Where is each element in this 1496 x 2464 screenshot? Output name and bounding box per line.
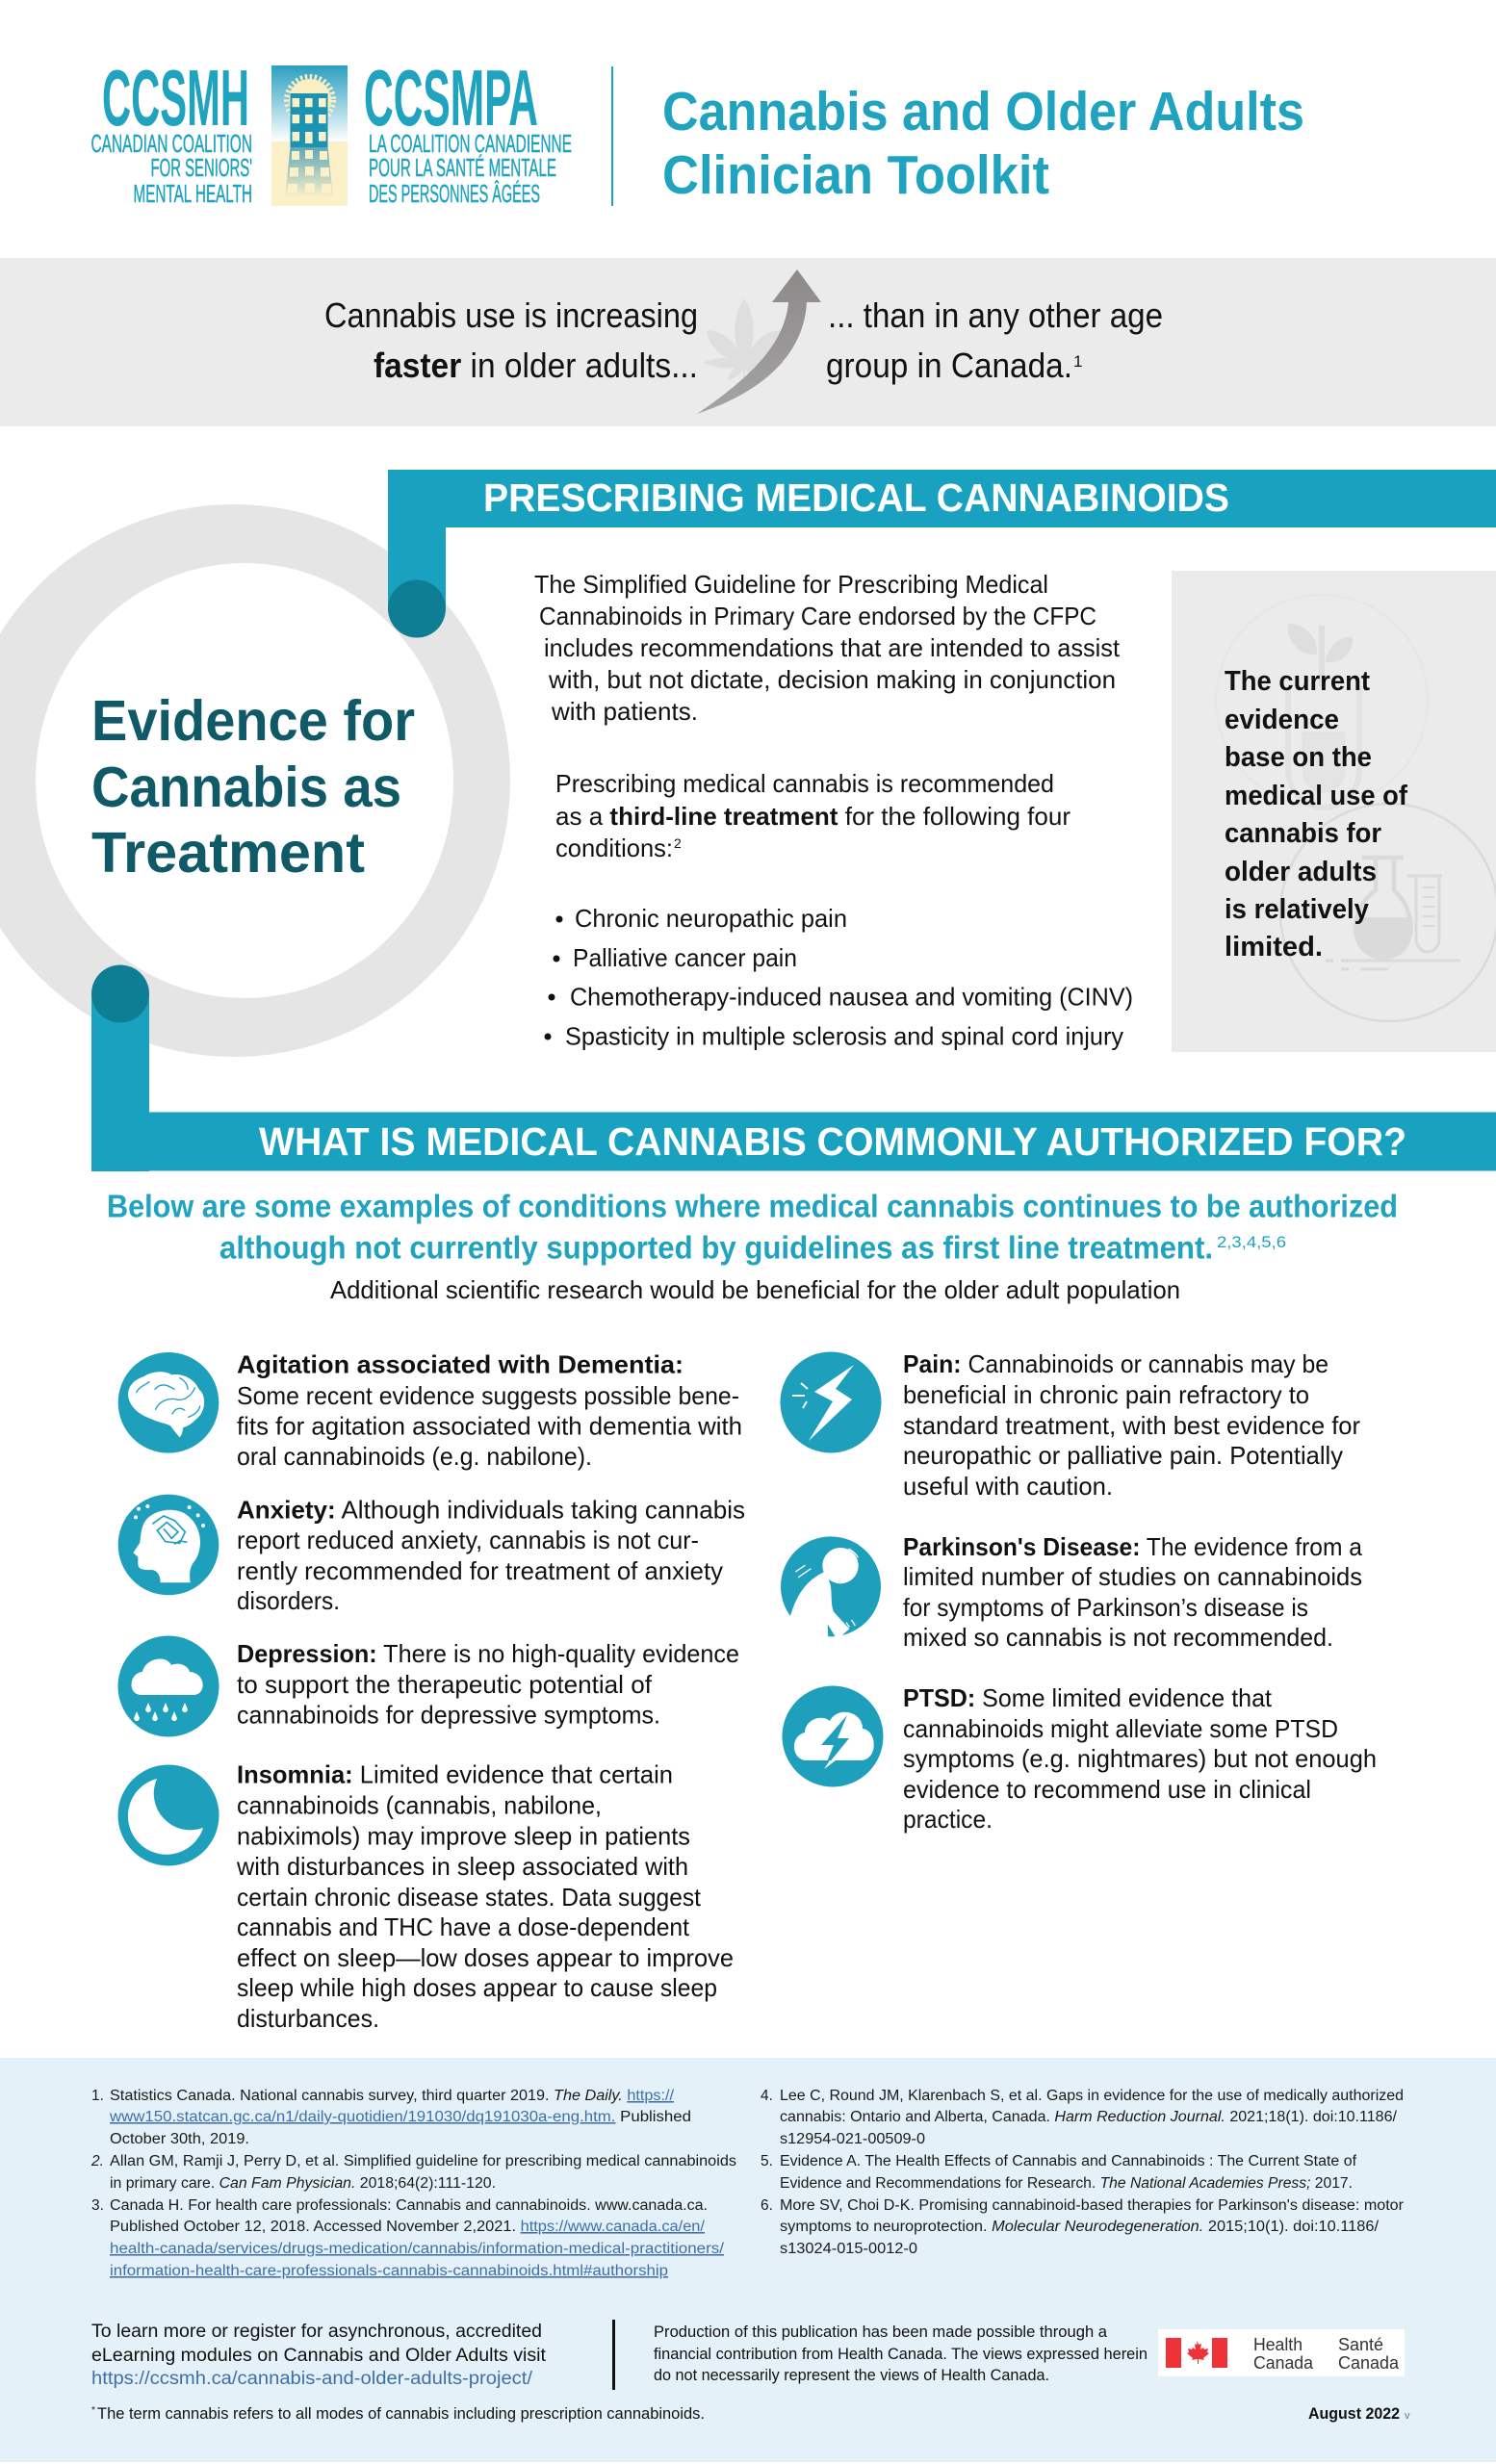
text: evidence statement: older adults	[1225, 857, 1377, 887]
text: pain	[903, 1349, 1360, 1501]
references: left column: Allan GM, Ramji J, Perry D, et al. Simplified guideline for prescribing medical cannabinoids	[110, 2153, 736, 2169]
text: evidence statement	[1225, 666, 1407, 962]
text: evidence statement: evidence	[1225, 705, 1339, 735]
text: anxiety: report reduced anxiety, cannabis is not cur-	[237, 1526, 699, 1554]
references: right column: 6.	[761, 2197, 773, 2214]
text: dementia: fits for agitation associated with dementia with	[237, 1411, 742, 1440]
references: right column: s12954-021-00509-0	[780, 2131, 925, 2147]
text block: guideline introduction: with patients.	[551, 697, 698, 726]
list: four conditions: Spasticity in multiple sclerosis and spinal cord injury	[565, 1022, 1123, 1051]
list: four conditions: Palliative cancer pain	[573, 943, 797, 972]
references: right column: Lee C, Round JM, Klarenbach S, et al. Gaps in evidence for the use of medically authorized	[780, 2088, 1404, 2104]
heading: evidence for cannabis as treatment: Cannabis as	[91, 756, 401, 819]
icon: rain cloud	[117, 1636, 219, 1736]
text: insomnia: Insomnia: Limited evidence that certain	[237, 1759, 673, 1788]
text: insomnia: effect on sleep—low doses appear to improve	[237, 1943, 734, 1972]
references: right column: Evidence A. The Health Effects of Cannabis and Cannabinoids : The Current State of	[780, 2153, 1357, 2169]
references: right column: 5.	[761, 2153, 773, 2169]
text: insomnia: cannabinoids (cannabis, nabilone,	[237, 1790, 602, 1819]
text: insomnia: sleep while high doses appear to cause sleep	[237, 1973, 717, 2002]
references: left column: October 30th, 2019.	[110, 2131, 249, 2147]
heading: evidence for cannabis as treatment: Evidence for	[91, 689, 415, 753]
text: elearning call to action: https://ccsmh.ca/cannabis-and-older-adults-project/	[91, 2369, 533, 2389]
text: pain: Pain: Cannabinoids or cannabis may be	[903, 1349, 1328, 1378]
references: left column: information-health-care-professionals-cannabis-cannabinoids.html#authorship	[110, 2263, 668, 2279]
text: evidence statement: medical use of	[1225, 781, 1407, 811]
text: anxiety: rently recommended for treatment of anxiety	[237, 1556, 723, 1585]
icon: hunched figure	[781, 1536, 881, 1640]
text: pain: neuropathic or palliative pain. Potentially	[903, 1441, 1343, 1470]
text block: guideline introduction: The Simplified Guideline for Prescribing Medical	[534, 570, 1048, 599]
title: Clinician Toolkit	[662, 144, 1049, 206]
text: evidence statement: limited.	[1225, 932, 1323, 962]
references: right column: Evidence and Recommendations for Research. The National Academies Press; 2017.	[780, 2175, 1353, 2192]
text: dementia: Some recent evidence suggests possible bene-	[237, 1381, 739, 1410]
text: ptsd: evidence to recommend use in clinical	[903, 1775, 1311, 1804]
logo text: English name: CANADIAN COALITION	[90, 129, 252, 158]
text: pain: useful with caution.	[903, 1472, 1113, 1501]
logo: health canada: Canada	[1338, 2353, 1400, 2373]
icon: flask and test tube watermark	[1280, 804, 1496, 1021]
text block: guideline introduction: includes recommendations that are intended to assist	[544, 633, 1121, 662]
text: elearning call to action: To learn more or register for asynchronous, accredited	[91, 2322, 542, 2342]
text: evidence statement: base on the	[1225, 742, 1372, 773]
logo: building with sun	[271, 65, 348, 206]
references: left column: 2.	[90, 2153, 104, 2169]
text: insomnia: certain chronic disease states. Data suggest	[237, 1883, 702, 1912]
item: insomnia	[117, 1759, 734, 2033]
logo text: English name: MENTAL HEALTH	[133, 179, 252, 208]
item: pain	[780, 1349, 1360, 1501]
section bar: what is medical cannabis commonly authorized for: WHAT IS MEDICAL CANNABIS COMMONLY AUTHORIZED FOR?	[259, 1119, 1406, 1164]
item: depression	[117, 1636, 739, 1736]
list: four conditions	[545, 904, 1133, 1051]
text: right statement: 1	[1073, 352, 1082, 371]
text block: guideline introduction	[534, 570, 1121, 726]
icon: brain	[118, 1352, 219, 1453]
text: parkinson's: for symptoms of Parkinson’s disease is	[903, 1593, 1308, 1622]
intro text: examples of authorized conditions: although not currently supported by guidelines as first line treatment.	[219, 1230, 1213, 1265]
references: left column	[90, 2088, 736, 2279]
heading: evidence for cannabis as treatment: Treatment	[91, 821, 365, 885]
references: left column: Canada H. For health care professionals: Cannabis and cannabinoids. www.canada.ca.	[110, 2197, 708, 2214]
date: August 2022	[1308, 2404, 1400, 2423]
footnote: The term cannabis refers to all modes of cannabis including prescription cannabinoids.	[97, 2404, 705, 2423]
text: funding acknowledgement: Production of this publication has been made possible through a	[654, 2323, 1108, 2341]
logo: health canada: Canada	[1253, 2353, 1314, 2373]
logo text: French name: DES PERSONNES ÂGÉES	[369, 179, 540, 208]
text: evidence statement: is relatively	[1225, 894, 1369, 925]
references: left column: Published October 12, 2018. Accessed November 2,2021. https://www.canada.ca/en/	[110, 2219, 706, 2235]
text: elearning call to action: eLearning modules on Cannabis and Older Adults visit	[91, 2346, 547, 2366]
text: ptsd: PTSD: Some limited evidence that	[903, 1683, 1273, 1712]
text: depression	[237, 1639, 739, 1729]
text: ptsd	[903, 1683, 1377, 1834]
references: right column	[761, 2088, 1404, 2257]
intro text: examples of authorized conditions: Below are some examples of conditions where medical cannabis continues to be authorized	[107, 1188, 1398, 1224]
list: four conditions: Chronic neuropathic pain	[575, 904, 847, 933]
text: left statement	[324, 295, 698, 385]
logo text: French name: CCSMPA	[364, 53, 538, 142]
footnote: *	[91, 2405, 95, 2416]
text block: third-line treatment: conditions:	[555, 834, 673, 862]
text: evidence statement: The current	[1225, 666, 1370, 697]
text: anxiety	[237, 1496, 745, 1615]
text block: third-line treatment: 2	[674, 835, 682, 851]
icon: head with scribble	[118, 1495, 219, 1595]
references: left column: 3.	[91, 2197, 104, 2214]
references: right column: symptoms to neuroprotection. Molecular Neurodegeneration. 2015;10(1). doi:10.1186/	[780, 2219, 1380, 2235]
references: right column: More SV, Choi D-K. Promising cannabinoid-based therapies for Parkinson's disease: motor	[780, 2197, 1404, 2214]
text: pain: beneficial in chronic pain refractory to	[903, 1380, 1309, 1409]
intro text: examples of authorized conditions: Additional scientific research would be beneficial for the older adult population	[330, 1275, 1180, 1304]
text: left statement: Cannabis use is increasing	[324, 295, 698, 335]
references: left column: Statistics Canada. National cannabis survey, third quarter 2019. The Daily. https://	[110, 2088, 675, 2104]
references: right column: cannabis: Ontario and Alberta, Canada. Harm Reduction Journal. 2021;18(1). doi:10.1186/	[780, 2109, 1398, 2125]
text: dementia: Agitation associated with Dementia:	[237, 1349, 684, 1378]
references: left column: in primary care. Can Fam Physician. 2018;64(2):111-120.	[110, 2175, 496, 2192]
logo: health canada: Santé	[1338, 2335, 1383, 2354]
references: right column: 4.	[761, 2088, 773, 2104]
text: depression: cannabinoids for depressive symptoms.	[237, 1700, 660, 1729]
title: Cannabis and Older Adults	[662, 81, 1304, 142]
icon: lightning pain	[780, 1351, 882, 1453]
text: ptsd: cannabinoids might alleviate some PTSD	[903, 1714, 1338, 1743]
text: parkinson's: Parkinson's Disease: The evidence from a	[903, 1532, 1363, 1561]
references: left column: health-canada/services/drugs-medication/cannabis/information-medical-practitioners/	[110, 2241, 725, 2257]
text: evidence statement: cannabis for	[1225, 818, 1381, 849]
text: ptsd: symptoms (e.g. nightmares) but not enough	[903, 1744, 1377, 1773]
title	[662, 81, 1304, 206]
icon: storm cloud	[782, 1686, 884, 1786]
intro text: examples of authorized conditions: 2,3,4,5,6	[1217, 1233, 1286, 1251]
panel: evidence for cannabis as treatment circle	[0, 504, 510, 1057]
references: left column: 1.	[91, 2088, 104, 2104]
logo text: French name: POUR LA SANTÉ MENTALE	[369, 153, 556, 182]
icon: test tube with plant watermark	[1216, 595, 1428, 808]
icon: cannabis leaf	[702, 298, 787, 393]
text: parkinson's: limited number of studies on cannabinoids	[903, 1562, 1362, 1591]
references: right column: s13024-015-0012-0	[780, 2241, 917, 2257]
icon: crescent moon	[117, 1765, 219, 1865]
item: parkinson's disease	[781, 1532, 1363, 1652]
text: funding acknowledgement	[654, 2323, 1148, 2384]
list: four conditions: Chemotherapy-induced nausea and vomiting (CINV)	[570, 982, 1133, 1011]
text: insomnia	[236, 1759, 734, 2033]
text: insomnia: disturbances.	[237, 2004, 379, 2033]
text: right statement: ... than in any other age	[828, 295, 1163, 335]
text block: third-line treatment	[555, 769, 1070, 862]
text block: third-line treatment: Prescribing medical cannabis is recommended	[555, 769, 1054, 798]
section bar: what is medical cannabis commonly authorized for	[91, 964, 1496, 1171]
section bar: prescribing medical cannabinoids: PRESCRIBING MEDICAL CANNABINOIDS	[483, 475, 1229, 520]
text: elearning call to action	[91, 2322, 547, 2389]
text: parkinson's	[903, 1532, 1363, 1652]
text: funding acknowledgement: financial contribution from Health Canada. The views expressed herein	[654, 2345, 1148, 2363]
text: insomnia: nabiximols) may improve sleep in patients	[237, 1821, 690, 1850]
text block: guideline introduction: Cannabinoids in Primary Care endorsed by the CFPC	[539, 602, 1096, 630]
references: left column: www150.statcan.gc.ca/n1/daily-quotidien/191030/dq191030a-eng.htm. Published	[109, 2109, 691, 2125]
text: parkinson's: mixed so cannabis is not recommended.	[903, 1623, 1333, 1652]
item: ptsd	[782, 1683, 1377, 1834]
arrow: rising trend	[697, 270, 821, 414]
text: funding acknowledgement: do not necessarily represent the views of Health Canada.	[654, 2366, 1049, 2384]
text: depression: to support the therapeutic potential of	[237, 1670, 653, 1699]
text: right statement	[826, 295, 1163, 385]
text: dementia: oral cannabinoids (e.g. nabilone).	[237, 1442, 592, 1471]
text: left statement: faster in older adults...	[374, 346, 698, 385]
logo text: French name: LA COALITION CANADIENNE	[369, 129, 572, 158]
text: anxiety: Anxiety: Although individuals taking cannabis	[237, 1496, 745, 1525]
logo text: English name	[90, 53, 252, 208]
text: ptsd: practice.	[903, 1805, 993, 1834]
text: insomnia: cannabis and THC have a dose-dependent	[237, 1912, 690, 1941]
intro text: examples of authorized conditions	[107, 1188, 1398, 1304]
section bar: prescribing medical cannabinoids	[388, 470, 1496, 637]
text: depression: Depression: There is no high-quality evidence	[237, 1639, 739, 1668]
heading: evidence for cannabis as treatment	[91, 689, 415, 885]
logo text: French name	[364, 53, 572, 208]
header: logo and toolkit title	[90, 53, 1304, 208]
logo: health canada	[1158, 2329, 1405, 2376]
banner: cannabis use statistic	[0, 258, 1496, 426]
text: anxiety: disorders.	[237, 1586, 340, 1615]
text: right statement: group in Canada.	[826, 346, 1072, 385]
text block: guideline introduction: with, but not dictate, decision making in conjunction	[548, 665, 1116, 694]
item: agitation associated with dementia	[118, 1349, 742, 1471]
date: v	[1405, 2410, 1410, 2422]
text block: third-line treatment: as a third-line treatment for the following four	[555, 802, 1070, 831]
item: anxiety	[118, 1495, 745, 1615]
logo text: English name: FOR SENIORS'	[150, 153, 252, 182]
panel: footer	[0, 2058, 1496, 2462]
text: dementia	[237, 1349, 742, 1471]
logo: health canada: Health	[1253, 2335, 1303, 2354]
text: pain: standard treatment, with best evidence for	[903, 1411, 1360, 1440]
text: insomnia: with disturbances in sleep associated with	[236, 1852, 688, 1881]
logo text: English name: CCSMH	[102, 53, 249, 142]
panel: current evidence callout	[1172, 571, 1496, 1052]
